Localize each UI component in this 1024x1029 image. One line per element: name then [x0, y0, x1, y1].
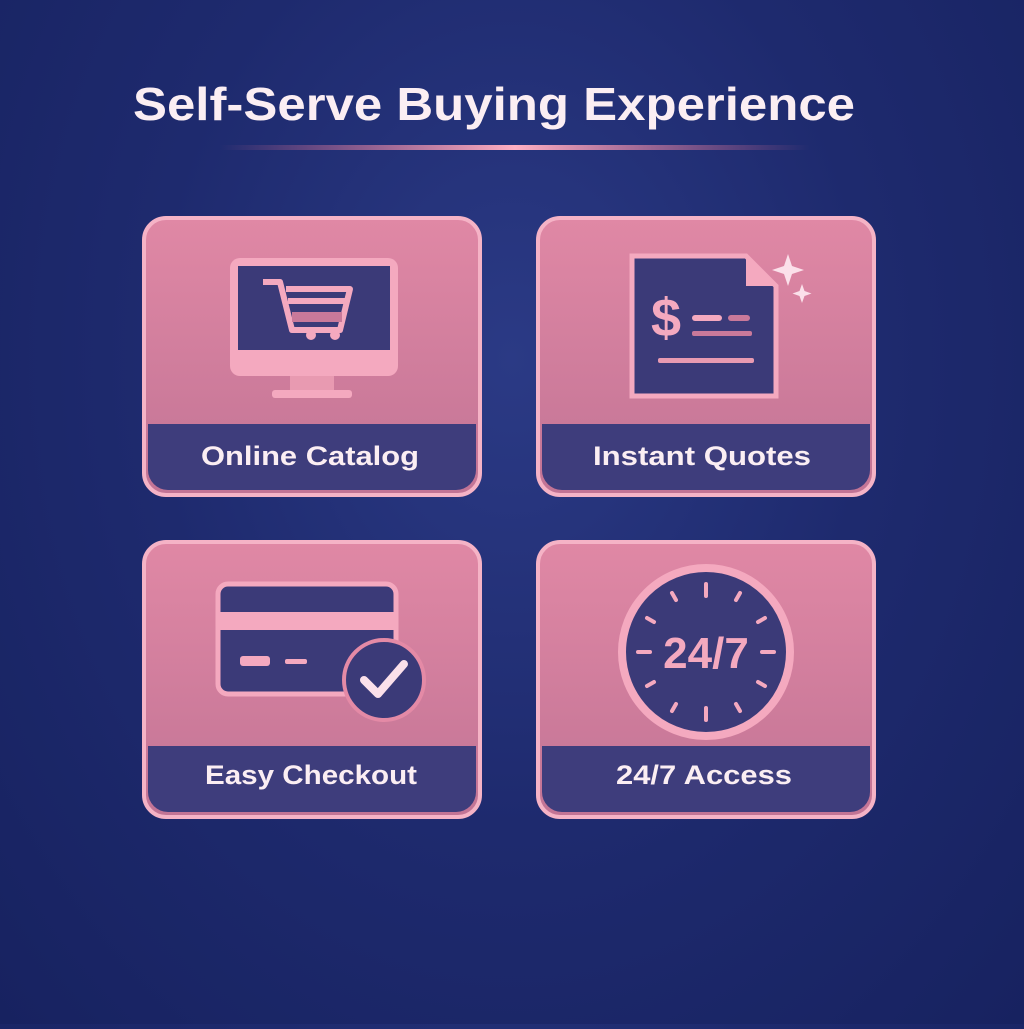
icon: quote document: $ [651, 288, 681, 348]
card: 24/7 access [538, 542, 874, 817]
card: online catalog [144, 218, 480, 495]
title underline [220, 145, 810, 150]
label: Easy Checkout [205, 760, 417, 790]
label: Instant Quotes [593, 441, 811, 471]
icon: quote document [632, 254, 812, 396]
icon: clock: 24/7 [663, 629, 749, 678]
label: Online Catalog [201, 441, 419, 471]
title: Self-Serve Buying Experience [133, 78, 855, 130]
icon: credit card check [218, 584, 424, 720]
card: easy checkout [144, 542, 480, 817]
card: instant quotes [538, 218, 874, 495]
icon: clock [622, 568, 790, 736]
label: 24/7 Access [616, 760, 792, 790]
icon: monitor cart [230, 258, 398, 398]
